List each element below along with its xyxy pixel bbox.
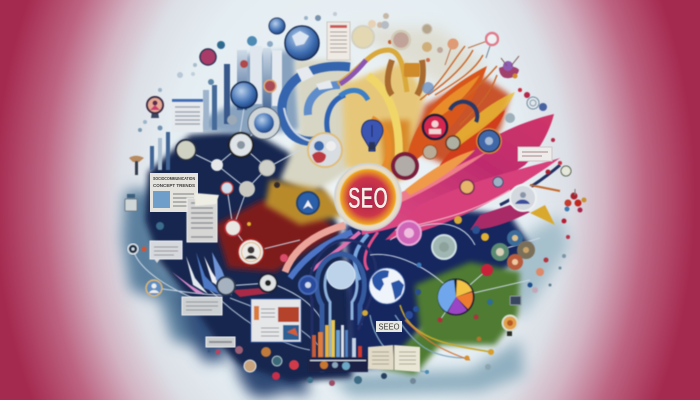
document: tall page	[187, 193, 219, 242]
pie: blue slice	[438, 280, 456, 312]
pale center field	[280, 60, 350, 195]
icon: ring target	[128, 244, 138, 254]
cast shadow under artwork	[122, 190, 570, 398]
icon: orange ring pin	[502, 316, 518, 336]
node: red rings center left	[225, 220, 264, 265]
nodes: lower left rings	[217, 274, 317, 295]
node: red user	[423, 115, 447, 139]
ribbon: yellow arcs and purple ribbon	[338, 50, 423, 172]
document: left news panel	[172, 99, 203, 132]
document: wing note	[518, 147, 552, 161]
badge text: SEO	[348, 182, 388, 215]
badge center	[340, 169, 396, 225]
node: pink sphere	[200, 49, 216, 65]
node: blue user circle	[297, 192, 319, 214]
icon: small device left	[125, 194, 137, 211]
ribbon: left pink blue swirl	[210, 225, 378, 350]
node: silver person	[510, 185, 560, 211]
icon: mushroom pin	[129, 156, 144, 175]
node: large ring globe	[248, 107, 280, 139]
navy field right	[345, 205, 530, 370]
pie: yellow slice	[456, 280, 472, 297]
icon: small pink ring	[397, 221, 421, 245]
globe: world map	[369, 268, 405, 304]
orange band	[380, 120, 410, 185]
open book	[368, 345, 420, 372]
node dots top and bottom scatter	[138, 12, 571, 386]
icon: small square	[510, 296, 521, 305]
node: pink ring top right	[486, 33, 498, 58]
document: concept trends: CONCEPT TRENDS	[153, 183, 195, 188]
gray blue upper field	[185, 50, 300, 135]
document: concept trends	[150, 173, 198, 212]
red field	[215, 200, 340, 272]
node: small globe top	[269, 18, 285, 34]
badge ring	[335, 164, 401, 230]
nodes: top tan rings	[352, 20, 458, 94]
node: red small circle	[264, 80, 276, 92]
connector lines	[133, 108, 540, 372]
arch: orange tile	[404, 63, 420, 77]
green field	[380, 262, 520, 375]
feather fan	[172, 252, 270, 297]
document: dashboard panel	[251, 299, 301, 342]
keyhole pin shape	[310, 240, 376, 372]
white bubbles in blue arc	[296, 66, 333, 90]
SEO badge	[335, 164, 401, 230]
orange red backing	[410, 75, 510, 170]
bar columns top	[150, 46, 282, 170]
node: globe top large	[285, 26, 319, 60]
document: SEO label: SEEO	[378, 322, 400, 332]
icon: person badge	[146, 280, 162, 296]
cluster: flower rosettes	[481, 230, 535, 276]
icon: avatar pin	[147, 97, 163, 118]
ribbon: pink magenta wing	[360, 114, 560, 240]
pie: orange slice	[456, 292, 473, 309]
panel: main artwork color fields	[145, 28, 530, 382]
node: small tan circles	[423, 102, 477, 159]
node: grey maroon ring	[391, 152, 419, 180]
ribbon: orange leaves and threads	[408, 40, 515, 170]
pie chart	[438, 278, 474, 316]
document: concept trends: SOCIOCOMMUNICATION	[153, 176, 195, 181]
document: top right report	[327, 22, 350, 60]
node: globe mid	[231, 82, 257, 108]
icon: light bulb	[362, 120, 383, 151]
document: speech note	[150, 241, 182, 263]
icon: purple bowl top right	[499, 56, 519, 78]
orange yellow shading	[265, 180, 345, 225]
document: SEO label	[376, 321, 402, 332]
node: upper left rings	[176, 115, 275, 197]
pale scatter upper right	[350, 28, 490, 85]
navy field left	[145, 130, 352, 382]
node: blue gear	[476, 128, 502, 154]
bar chart	[308, 320, 368, 372]
node: people sphere	[308, 133, 342, 167]
document: bottom note	[206, 337, 235, 347]
document: wide note	[182, 297, 222, 315]
node: grey teal ring	[432, 235, 456, 259]
ribbon: blue crescent arcs	[282, 66, 350, 142]
pie: purple slice	[448, 297, 467, 314]
cluster: red berries	[564, 189, 586, 212]
warm yellow center field	[342, 60, 425, 190]
